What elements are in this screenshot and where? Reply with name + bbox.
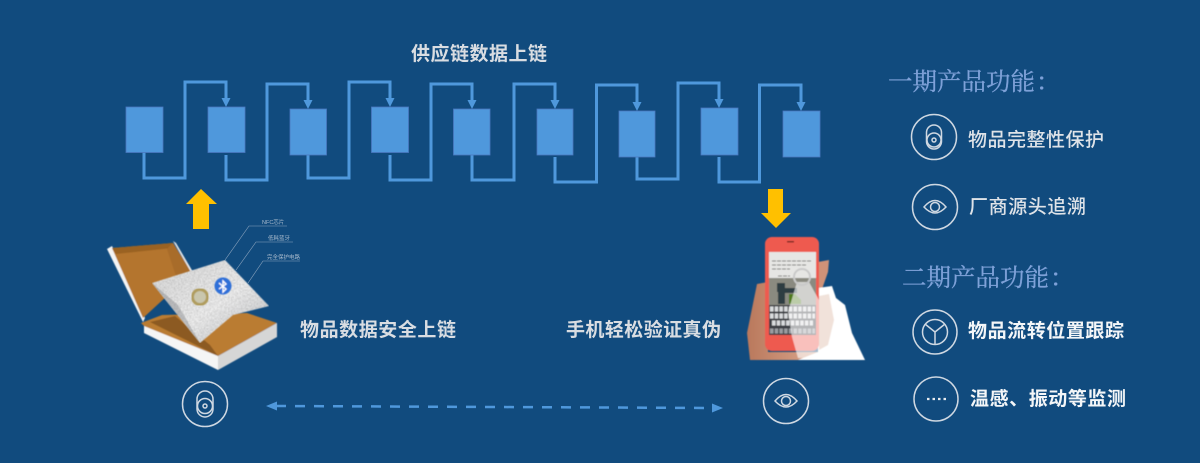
title: 供应链数据上链 bbox=[411, 42, 547, 65]
pouch shading bbox=[152, 283, 200, 343]
feature: origin tracing: 厂商源头追溯 bbox=[969, 196, 1086, 218]
feature: location tracking bbox=[913, 310, 1124, 354]
box white right side bbox=[218, 323, 277, 370]
arrow: down bbox=[761, 189, 791, 228]
heading: phase one: 一期产品功能： bbox=[888, 68, 1060, 96]
arrow: up bbox=[186, 189, 217, 229]
box interior bbox=[141, 313, 277, 356]
white hand bbox=[798, 286, 865, 360]
illustration: pizza box with foil pouch bbox=[107, 241, 277, 370]
pouch callout lines bbox=[225, 218, 301, 283]
icon: lock (bottom) bbox=[182, 382, 228, 426]
chain diagram bbox=[126, 82, 820, 182]
panel: phase one bbox=[888, 68, 1104, 230]
heading: phase two: 二期产品功能： bbox=[902, 264, 1074, 292]
pouch callout lines: 低耗蓝牙 bbox=[268, 234, 291, 242]
icon: eye (bottom) bbox=[764, 378, 808, 424]
keyboard bbox=[769, 305, 816, 335]
feature: sensing bbox=[914, 377, 1126, 421]
box parts bbox=[107, 241, 277, 370]
hand back bbox=[747, 282, 818, 360]
illustration: hand holding phone bbox=[747, 237, 865, 360]
phone screen bbox=[769, 252, 816, 335]
feature: location tracking: 物品流转位置跟踪 bbox=[968, 319, 1124, 342]
dashed double arrow bbox=[266, 402, 723, 412]
feature: origin tracing bbox=[912, 184, 1086, 230]
translucent finger bbox=[788, 282, 819, 358]
feature: integrity: 物品完整性保护 bbox=[968, 129, 1104, 151]
NFC coil bbox=[192, 290, 208, 304]
feature: integrity bbox=[912, 114, 1104, 160]
connector paths bbox=[144, 82, 806, 182]
panel: phase two bbox=[902, 264, 1126, 421]
bluetooth chip bbox=[214, 278, 232, 294]
caption: phone verification: 手机轻松验证真伪 bbox=[566, 318, 721, 341]
box white left side bbox=[144, 326, 218, 370]
foil pouch bbox=[152, 260, 269, 343]
phone body bbox=[765, 237, 819, 351]
caption: goods data: 物品数据安全上链 bbox=[300, 318, 456, 341]
open lid bbox=[107, 246, 145, 322]
blocks bbox=[126, 107, 820, 157]
feature: sensing: 温感、振动等监测 bbox=[970, 388, 1126, 410]
pouch callout lines: NFC芯片 bbox=[262, 218, 284, 226]
pouch callout lines: 完全保护电路 bbox=[267, 253, 301, 261]
